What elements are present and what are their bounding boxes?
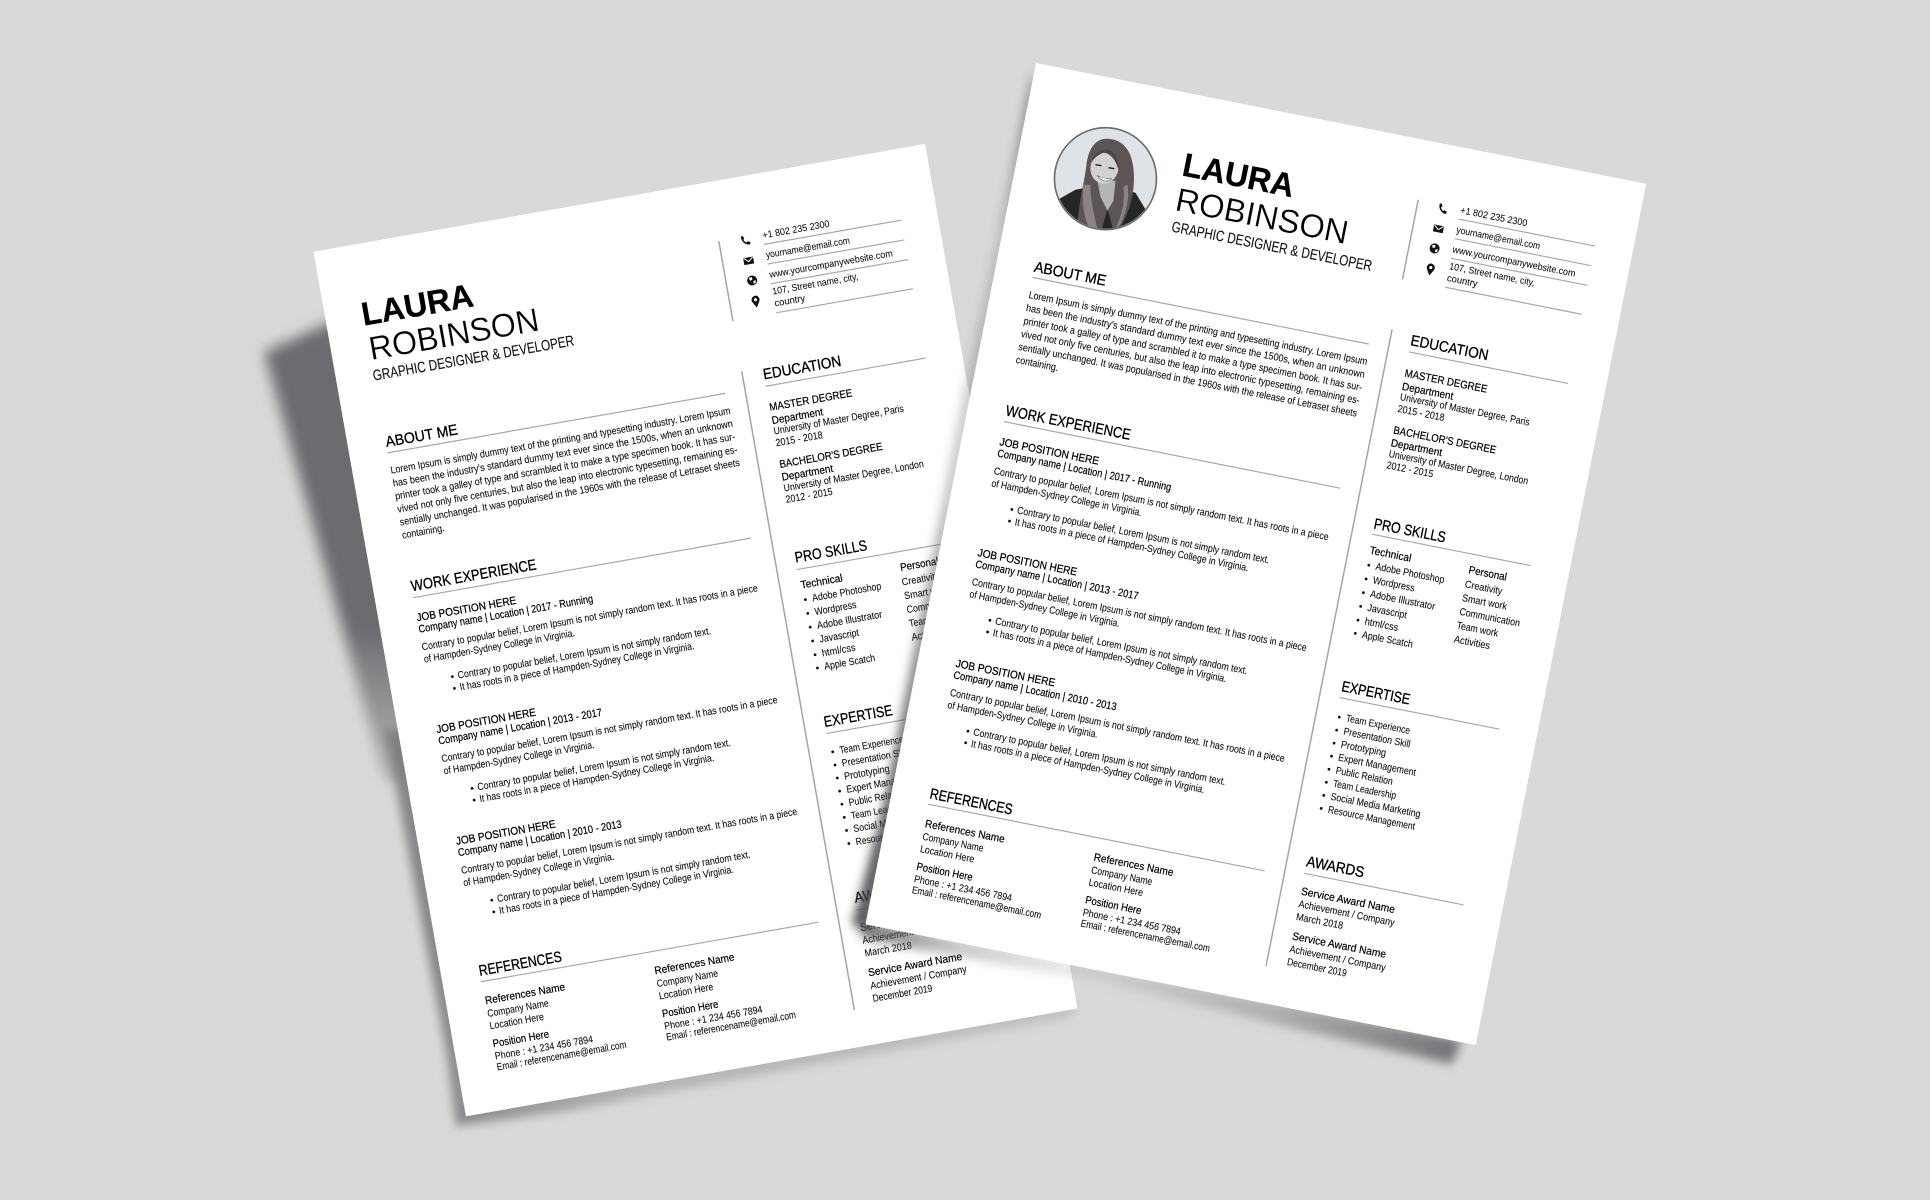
technical skills list: Adobe Photoshop	[811, 581, 883, 604]
job 3: Contrary to popular belief, Lorem Ipsum is not simply random text. It has roots in a piece	[949, 688, 1286, 765]
section: expertise	[823, 686, 1007, 850]
job 3: Contrary to popular belief, Lorem Ipsum is not simply random text.	[972, 727, 1226, 788]
job 3: of Hampden-Sydney College in Virginia.	[946, 700, 1099, 741]
reference 1: Company Name	[487, 998, 550, 1020]
section: about me: vived not only five centuries, but also the leap into electronic typesetting, remaining es-	[397, 445, 738, 516]
reference 2: References Name	[1093, 851, 1174, 879]
section: expertise: Social Media Marketing	[853, 808, 945, 835]
section: about me: containing.	[401, 523, 446, 542]
section: pro skills	[1351, 516, 1535, 670]
section: about me: Lorem Ipsum is simply dummy text of the printing and typesetting industry. Lorem Ipsum	[390, 406, 731, 477]
section: education: Department	[1390, 437, 1443, 459]
job 3: Contrary to popular belief, Lorem Ipsum is not simply random text. It has roots in a piece	[460, 807, 798, 877]
reference 2: Position Here	[661, 999, 719, 1020]
reference 1: Company Name	[921, 832, 985, 855]
section: education: Department	[781, 463, 834, 484]
job 2: of Hampden-Sydney College in Virginia.	[443, 740, 595, 777]
name heading: LAURA	[1180, 146, 1298, 204]
job 2: Contrary to popular belief, Lorem Ipsum is not simply random text.	[477, 738, 732, 793]
personal skills list: Communication	[1458, 607, 1521, 630]
reference 2: Company Name	[656, 968, 719, 990]
personal skills list: Creativity	[901, 571, 941, 588]
section: expertise: Team Leadership	[850, 800, 915, 822]
technical skills list	[1353, 560, 1446, 654]
section: education: University of Master Degree, London	[783, 459, 925, 495]
section: expertise: Social Media Marketing	[1329, 792, 1422, 820]
name heading: LAURA	[358, 277, 476, 333]
section: expertise: Resource Management	[855, 822, 944, 848]
job 3: Company name | Location | 2010 - 2013	[457, 819, 623, 859]
personal skills list: Smart work	[903, 583, 951, 602]
shadow: left resume left edge and bottom	[385, 730, 1076, 1126]
section: expertise: Team Leadership	[1332, 779, 1397, 802]
section: education: EDUCATION	[762, 353, 843, 383]
job 1	[984, 436, 1336, 588]
section: expertise: Presentation Skill	[841, 747, 910, 770]
job 3: It has roots in a piece of Hampden-Sydney College in Virginia.	[970, 739, 1205, 796]
section: about me: sentially unchanged. It was popularised in the 1960s with the release of Letraset sheets	[1017, 342, 1358, 420]
job 2: Company name | Location | 2013 - 2017	[974, 559, 1139, 603]
section: education: BACHELOR'S DEGREE	[1392, 425, 1497, 457]
section: awards: AWARDS	[853, 880, 914, 907]
reference 1	[911, 818, 1055, 921]
job 3: JOB POSITION HERE	[955, 658, 1056, 689]
personal skills list: Activities	[911, 626, 949, 644]
section: pro skills: Personal	[899, 556, 939, 574]
section: expertise: Resource Management	[1327, 805, 1416, 833]
technical skills list: Javascript	[819, 628, 860, 646]
section: education: EDUCATION	[1409, 332, 1490, 364]
job 1: Company name | Location | 2017 - Running	[996, 448, 1172, 494]
section: references: REFERENCES	[928, 786, 1014, 819]
personal skills list: Team work	[908, 612, 952, 630]
contact text: www.yourcompanywebsite.com	[768, 248, 894, 281]
job 3: Company name | Location | 2010 - 2013	[952, 669, 1118, 713]
section: expertise: Prototyping	[1340, 740, 1387, 759]
contact text: country	[774, 293, 806, 309]
section: awards: December 2019	[872, 983, 934, 1005]
job 2: It has roots in a piece of Hampden-Sydney College in Virginia.	[479, 753, 715, 805]
section: pro skills	[794, 522, 976, 674]
section: expertise: EXPERTISE	[1340, 678, 1412, 708]
job 1	[416, 553, 767, 699]
technical skills list: Adobe Illustrator	[816, 609, 884, 632]
section: education	[1385, 332, 1572, 503]
section: pro skills: Technical	[800, 572, 844, 592]
contact text: +1 802 235 2300	[762, 219, 831, 241]
section: awards: March 2018	[864, 940, 913, 960]
job 3: JOB POSITION HERE	[455, 818, 557, 848]
job 1: Company name | Location | 2017 - Running	[418, 593, 594, 636]
contact text: 107, Street name, city,	[1448, 261, 1536, 289]
job 1: Contrary to popular belief, Lorem Ipsum is not simply random text.	[1016, 506, 1270, 566]
job 2: of Hampden-Sydney College in Virginia.	[968, 589, 1121, 630]
name heading: ROBINSON	[366, 301, 542, 367]
reference 1: Email : referencename@email.com	[911, 885, 1042, 921]
job 2: JOB POSITION HERE	[977, 547, 1078, 579]
section: awards: AWARDS	[1305, 853, 1366, 881]
section: awards: Service Award Name	[867, 951, 963, 979]
section: awards: Service Award Name	[1291, 931, 1387, 961]
job 3	[940, 658, 1292, 810]
technical skills list: Wordpress	[814, 600, 857, 618]
contact text: yourname@email.com	[1455, 225, 1541, 252]
reference 2: Email : referencename@email.com	[1080, 919, 1211, 955]
icon: phone	[1438, 203, 1448, 214]
reference 2: Phone : +1 234 456 7894	[1082, 908, 1182, 938]
shadow: right resume left edge	[852, 68, 1036, 928]
reference 2: Email : referencename@email.com	[665, 1010, 797, 1044]
section: work experience: WORK EXPERIENCE	[410, 556, 538, 595]
reference 1	[484, 973, 627, 1073]
reference 1: Position Here	[492, 1028, 550, 1050]
reference 1: Location Here	[919, 844, 975, 866]
contact text: yourname@email.com	[765, 236, 851, 261]
section: references	[910, 786, 1268, 962]
section: pro skills: Personal	[1468, 564, 1508, 584]
reference 2: Location Here	[1088, 877, 1144, 899]
section: expertise: Team Experience	[839, 734, 905, 757]
job 1: of Hampden-Sydney College in Virginia.	[423, 628, 576, 666]
contact text: +1 802 235 2300	[1459, 205, 1528, 229]
section: about me: has been the industry's standard dummy text ever since the 1500s, when an unknown	[1025, 303, 1366, 381]
reference 1: Email : referencename@email.com	[496, 1040, 627, 1073]
section: expertise: Team Experience	[1345, 714, 1411, 737]
section: expertise	[1317, 678, 1503, 845]
section: work experience	[410, 519, 808, 922]
reference 1: References Name	[924, 818, 1006, 846]
section: about me	[384, 374, 743, 542]
job 1: Contrary to popular belief, Lorem Ipsum is not simply random text. It has roots in a piece	[993, 466, 1330, 543]
name heading	[1169, 146, 1388, 275]
job 1: Contrary to popular belief, Lorem Ipsum is not simply random text. It has roots in a piece	[421, 583, 759, 653]
reference 1: Position Here	[915, 861, 974, 884]
section: education: Department	[771, 406, 824, 427]
personal skills list	[901, 567, 973, 644]
job 3: It has roots in a piece of Hampden-Sydney College in Virginia.	[498, 865, 735, 917]
section: awards: Achievement / Company	[870, 964, 968, 992]
technical skills list: Wordpress	[1372, 575, 1415, 594]
job 1: JOB POSITION HERE	[999, 436, 1100, 468]
section: education: 2012 - 2015	[1385, 460, 1434, 480]
job 2: It has roots in a piece of Hampden-Sydney College in Virginia.	[992, 628, 1227, 685]
section: awards: Service Award Name	[859, 906, 955, 934]
technical skills list: html/css	[821, 643, 856, 659]
technical skills list: Apple Scatch	[823, 653, 876, 673]
job 2	[962, 547, 1314, 699]
section: education	[762, 338, 946, 506]
icon: pin	[1425, 263, 1436, 276]
job 1: Contrary to popular belief, Lorem Ipsum is not simply random text.	[457, 626, 712, 682]
section: pro skills: Technical	[1369, 545, 1412, 565]
contact text: 107, Street name, city,	[772, 272, 859, 298]
section: references	[477, 903, 835, 1074]
contact text: www.yourcompanywebsite.com	[1451, 244, 1576, 280]
section: about me: ABOUT ME	[384, 422, 459, 451]
contact block	[1402, 197, 1598, 315]
job 2: Contrary to popular belief, Lorem Ipsum is not simply random text. It has roots in a piece	[441, 695, 779, 765]
section: work experience: WORK EXPERIENCE	[1004, 402, 1132, 444]
section: references: REFERENCES	[477, 948, 563, 980]
section: about me: ABOUT ME	[1033, 259, 1108, 290]
section: expertise: EXPERTISE	[823, 702, 894, 731]
section: about me: printer took a galley of type and scrambled it to make a type specimen book. It has sur-	[394, 432, 736, 503]
job 2: JOB POSITION HERE	[435, 707, 537, 736]
job 1: It has roots in a piece of Hampden-Sydney College in Virginia.	[459, 641, 695, 693]
reference 1: Phone : +1 234 456 7894	[494, 1034, 594, 1063]
personal skills list: Team work	[1456, 621, 1500, 640]
technical skills list: Apple Scatch	[1361, 630, 1414, 651]
job 2: Contrary to popular belief, Lorem Ipsum is not simply random text. It has roots in a piece	[971, 577, 1308, 654]
section: education: 2015 - 2018	[1397, 404, 1446, 424]
section: expertise: Expert Management	[846, 771, 925, 796]
column divider	[1266, 329, 1392, 966]
section: expertise: Prototyping	[843, 764, 891, 783]
section: expertise: Public Relation	[848, 788, 907, 809]
section: education: BACHELOR'S DEGREE	[779, 441, 884, 471]
section: about me: vived not only five centuries, but also the leap into electronic typesetting, remaining es-	[1020, 329, 1361, 407]
reference 1: Location Here	[489, 1012, 545, 1032]
section: education: University of Master Degree, Paris	[773, 404, 905, 437]
section: education: 2012 - 2015	[785, 487, 834, 506]
contact text	[761, 209, 899, 310]
technical skills list: Adobe Illustrator	[1369, 589, 1436, 613]
section: education: University of Master Degree, Paris	[1399, 392, 1531, 429]
personal skills list: Activities	[1453, 634, 1491, 652]
section: about me: sentially unchanged. It was popularised in the 1960s with the release of Letraset sheets	[399, 458, 741, 529]
section: awards: Achievement / Company	[1298, 899, 1396, 929]
personal skills list	[1453, 579, 1526, 657]
reference 1: References Name	[484, 981, 566, 1007]
section: awards: Service Award Name	[1300, 886, 1396, 916]
section: education: MASTER DEGREE	[768, 387, 853, 414]
resume page: left (back)	[314, 144, 1077, 1116]
icon: phone	[741, 235, 751, 246]
page sheet	[314, 144, 1077, 1116]
technical skills list: Javascript	[1366, 603, 1408, 621]
section: expertise: Public Relation	[1335, 766, 1394, 788]
section: awards: March 2018	[1295, 912, 1344, 932]
column divider	[742, 371, 854, 1010]
section: about me: has been the industry's standard dummy text ever since the 1500s, when an unknown	[392, 419, 734, 490]
reference 2	[654, 943, 797, 1044]
reference 2: Position Here	[1084, 894, 1142, 917]
job 2	[435, 665, 787, 810]
portrait photo	[1054, 128, 1156, 233]
section: awards	[853, 862, 1033, 1005]
technical skills list: html/css	[1364, 617, 1399, 634]
section: about me: Lorem Ipsum is simply dummy text of the printing and typesetting industry. Lorem Ipsum	[1028, 290, 1368, 368]
contact text: country	[1446, 273, 1479, 290]
contact block	[718, 206, 913, 321]
job 2: Company name | Location | 2013 - 2017	[437, 707, 603, 747]
section: about me: printer took a galley of type and scrambled it to make a type specimen book. It has sur-	[1023, 316, 1363, 394]
job 2: Contrary to popular belief, Lorem Ipsum is not simply random text.	[994, 616, 1248, 677]
name heading: ROBINSON	[1173, 181, 1352, 251]
section: expertise: Presentation Skill	[1342, 727, 1411, 751]
name heading	[358, 261, 576, 385]
icon: mail	[1433, 224, 1444, 233]
section: education: 2015 - 2018	[775, 430, 824, 449]
name heading: GRAPHIC DESIGNER & DEVELOPER	[372, 332, 576, 385]
resume page: right (front)	[865, 63, 1646, 1045]
section: education: MASTER DEGREE	[1404, 368, 1488, 396]
job 1: It has roots in a piece of Hampden-Sydney College in Virginia.	[1014, 517, 1249, 574]
job 3: of Hampden-Sydney College in Virginia.	[463, 852, 615, 889]
reference 2: Company Name	[1090, 865, 1153, 888]
reference 2: References Name	[654, 951, 735, 977]
reference 2: Phone : +1 234 456 7894	[664, 1004, 764, 1033]
personal skills list: Smart work	[1461, 593, 1509, 613]
icon: pin	[751, 295, 761, 308]
section: pro skills: PRO SKILLS	[794, 537, 868, 567]
job 1: of Hampden-Sydney College in Virginia.	[990, 478, 1143, 519]
section: awards: December 2019	[1286, 957, 1348, 980]
job 3	[455, 777, 806, 922]
section: awards: Achievement / Company	[1289, 944, 1387, 974]
icon: mail	[743, 256, 754, 265]
section: work experience	[940, 402, 1344, 810]
technical skills list: Adobe Photoshop	[1375, 562, 1446, 586]
personal skills list: Creativity	[1464, 579, 1504, 598]
page sheet	[865, 63, 1646, 1045]
technical skills list	[803, 581, 895, 674]
section: about me: containing.	[1015, 355, 1059, 374]
icon: globe	[746, 275, 758, 286]
job 1: JOB POSITION HERE	[416, 595, 517, 624]
section: education: University of Master Degree, London	[1388, 449, 1529, 487]
contact text	[1445, 205, 1584, 308]
shadow: right resume bottom edge	[858, 915, 1462, 1064]
section: awards: Achievement / Company	[862, 919, 960, 947]
name heading: GRAPHIC DESIGNER & DEVELOPER	[1170, 219, 1374, 275]
section: about me	[1015, 259, 1374, 433]
icon: globe	[1429, 243, 1440, 254]
personal skills list: Communication	[906, 595, 968, 616]
shadow: left resume top-left cast	[264, 318, 425, 780]
reference 2	[1080, 851, 1224, 955]
reference 2: Location Here	[658, 982, 715, 1002]
section: awards	[1286, 853, 1468, 999]
section: pro skills: PRO SKILLS	[1372, 516, 1447, 546]
reference 1: Phone : +1 234 456 7894	[913, 874, 1013, 904]
section: education: Department	[1401, 381, 1454, 403]
job 3: Contrary to popular belief, Lorem Ipsum is not simply random text.	[496, 850, 751, 905]
section: expertise: Expert Management	[1337, 753, 1417, 779]
